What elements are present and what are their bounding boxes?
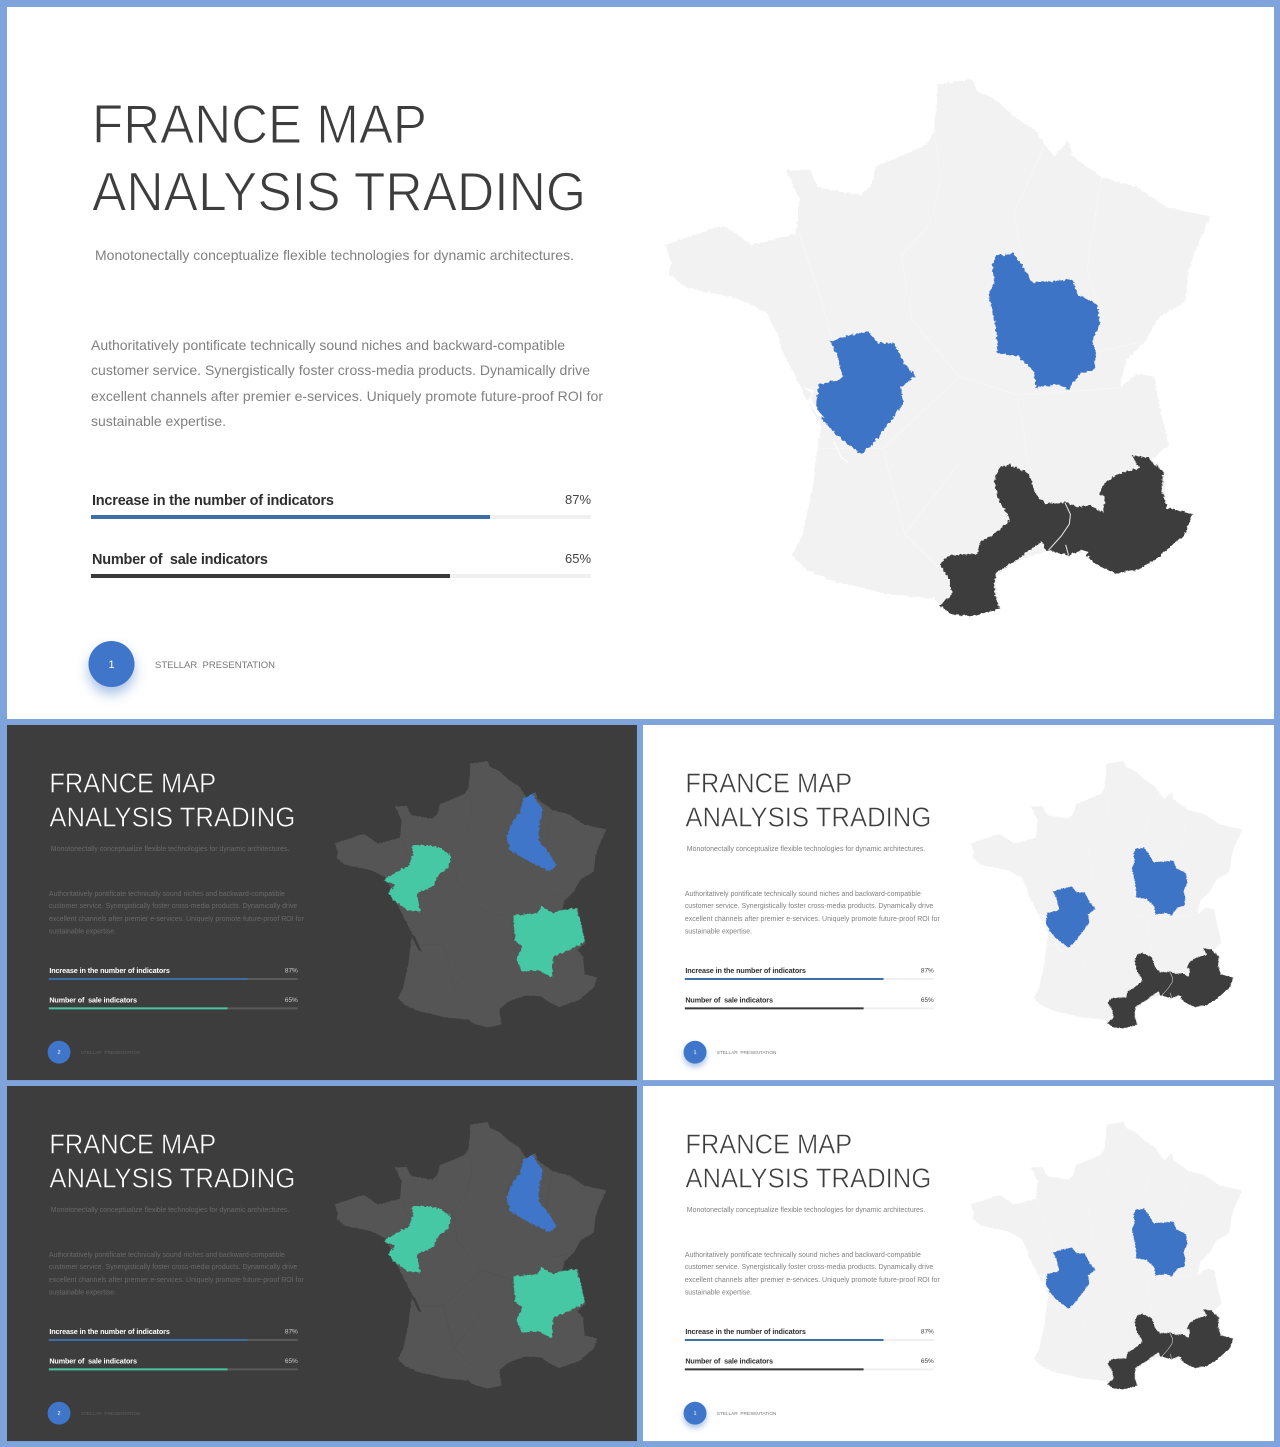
- title: [49, 768, 295, 832]
- panel: light slide bottom: [643, 1086, 1274, 1441]
- progress bar: indicators 87%: 87%: [565, 492, 591, 507]
- progress bar: indicators 87%: [685, 966, 934, 980]
- map of France with highlighted regions: [334, 1122, 606, 1388]
- footer label: STELLAR PRESENTATION: [81, 1411, 141, 1417]
- body paragraph: customer service. Synergistically foster cross-media products. Dynamically drive: [49, 1264, 297, 1271]
- body paragraph: customer service. Synergistically foster cross-media products. Dynamically drive: [91, 362, 590, 378]
- title: FRANCE MAP: [685, 768, 852, 799]
- page number badge: [684, 1041, 706, 1064]
- body paragraph: [49, 891, 304, 936]
- body paragraph: excellent channels after premier e-services. Uniquely promote future-proof ROI for: [49, 1277, 304, 1284]
- body paragraph: excellent channels after premier e-services. Uniquely promote future-proof ROI for: [91, 388, 603, 404]
- progress bar: indicators 87%: 87%: [921, 1329, 934, 1336]
- body paragraph: [91, 337, 603, 429]
- progress bar: indicators 87%: 87%: [285, 1329, 298, 1336]
- progress bar: indicators 87%: [91, 492, 591, 519]
- page number badge: 1: [694, 1411, 697, 1417]
- body paragraph: sustainable expertise.: [49, 1290, 116, 1297]
- progress bar: sale indicators 65%: Number of sale indicators: [685, 995, 773, 1004]
- progress bar: sale indicators 65%: 65%: [565, 551, 591, 566]
- map of France with highlighted regions: [970, 761, 1242, 1028]
- panel: light slide top: [643, 725, 1274, 1080]
- progress bar: indicators 87%: Increase in the number of indicators: [685, 1327, 806, 1336]
- body paragraph: sustainable expertise.: [685, 1290, 752, 1297]
- page number badge: 2: [58, 1411, 61, 1417]
- footer label: STELLAR PRESENTATION: [81, 1050, 141, 1056]
- progress bar: sale indicators 65%: [49, 995, 298, 1009]
- panel: dark slide bottom: [7, 1086, 637, 1441]
- title: ANALYSIS TRADING: [685, 1162, 931, 1193]
- progress bar: sale indicators 65%: Number of sale indicators: [92, 552, 268, 568]
- map of France with highlighted regions: [665, 79, 1211, 616]
- body paragraph: Authoritatively pontificate technically sound niches and backward-compatible: [49, 891, 285, 898]
- progress bar: sale indicators 65%: Number of sale indicators: [685, 1356, 773, 1365]
- title: FRANCE MAP: [92, 93, 427, 155]
- title: ANALYSIS TRADING: [49, 801, 295, 832]
- progress bar: sale indicators 65%: [91, 551, 591, 578]
- map of France with highlighted regions: [334, 761, 606, 1027]
- body paragraph: Authoritatively pontificate technically sound niches and backward-compatible: [91, 337, 565, 353]
- body paragraph: sustainable expertise.: [91, 413, 226, 429]
- progress bar: indicators 87%: [685, 1327, 934, 1341]
- progress bar: indicators 87%: [49, 966, 298, 980]
- progress bar: sale indicators 65%: 65%: [921, 1358, 934, 1365]
- body paragraph: [685, 891, 940, 936]
- body paragraph: [685, 1252, 940, 1297]
- footer label: STELLAR PRESENTATION: [155, 660, 275, 671]
- body paragraph: Authoritatively pontificate technically sound niches and backward-compatible: [685, 1252, 921, 1259]
- panel: dark slide top: [7, 725, 637, 1080]
- map of France with highlighted regions: [970, 1122, 1242, 1389]
- page number badge: [48, 1041, 70, 1064]
- body paragraph: Authoritatively pontificate technically sound niches and backward-compatible: [49, 1252, 285, 1259]
- page number badge: 2: [58, 1050, 61, 1056]
- title: ANALYSIS TRADING: [685, 801, 931, 832]
- body paragraph: [49, 1252, 304, 1297]
- progress bar: sale indicators 65%: 65%: [921, 997, 934, 1004]
- progress bar: indicators 87%: 87%: [285, 968, 298, 975]
- progress bar: sale indicators 65%: [685, 995, 934, 1009]
- body paragraph: excellent channels after premier e-services. Uniquely promote future-proof ROI for: [685, 916, 940, 923]
- title: [49, 1129, 295, 1193]
- title: [685, 1129, 931, 1193]
- title: [685, 768, 931, 832]
- body paragraph: customer service. Synergistically foster cross-media products. Dynamically drive: [685, 903, 933, 910]
- progress bar: sale indicators 65%: [685, 1356, 934, 1370]
- subtitle: Monotonectally conceptualize flexible technologies for dynamic architectures.: [687, 1207, 925, 1214]
- page number badge: [48, 1402, 70, 1425]
- subtitle: Monotonectally conceptualize flexible technologies for dynamic architectures.: [51, 846, 289, 853]
- progress bar: indicators 87%: [49, 1327, 298, 1341]
- page number badge: 1: [694, 1050, 697, 1056]
- progress bar: sale indicators 65%: 65%: [285, 997, 298, 1004]
- subtitle: Monotonectally conceptualize flexible technologies for dynamic architectures.: [95, 247, 574, 263]
- page number badge: 1: [108, 659, 115, 671]
- subtitle: Monotonectally conceptualize flexible technologies for dynamic architectures.: [51, 1207, 289, 1214]
- panel: large light slide: [7, 7, 1274, 719]
- subtitle: Monotonectally conceptualize flexible technologies for dynamic architectures.: [687, 846, 925, 853]
- title: ANALYSIS TRADING: [92, 160, 586, 222]
- title: [92, 93, 586, 222]
- body paragraph: excellent channels after premier e-services. Uniquely promote future-proof ROI for: [685, 1277, 940, 1284]
- progress bar: sale indicators 65%: Number of sale indicators: [49, 995, 137, 1004]
- page number badge: [684, 1402, 706, 1425]
- body paragraph: Authoritatively pontificate technically sound niches and backward-compatible: [685, 891, 921, 898]
- progress bar: indicators 87%: Increase in the number of indicators: [92, 493, 334, 509]
- progress bar: sale indicators 65%: [49, 1356, 298, 1370]
- page number badge: [88, 641, 134, 687]
- body paragraph: sustainable expertise.: [685, 929, 752, 936]
- progress bar: sale indicators 65%: 65%: [285, 1358, 298, 1365]
- body paragraph: customer service. Synergistically foster cross-media products. Dynamically drive: [685, 1264, 933, 1271]
- body paragraph: sustainable expertise.: [49, 929, 116, 936]
- title: FRANCE MAP: [49, 768, 216, 799]
- title: ANALYSIS TRADING: [49, 1162, 295, 1193]
- progress bar: indicators 87%: 87%: [921, 968, 934, 975]
- progress bar: indicators 87%: Increase in the number of indicators: [685, 966, 806, 975]
- title: FRANCE MAP: [685, 1129, 852, 1160]
- progress bar: sale indicators 65%: Number of sale indicators: [49, 1356, 137, 1365]
- body paragraph: excellent channels after premier e-services. Uniquely promote future-proof ROI for: [49, 916, 304, 923]
- progress bar: indicators 87%: Increase in the number of indicators: [49, 1327, 170, 1336]
- body paragraph: customer service. Synergistically foster cross-media products. Dynamically drive: [49, 903, 297, 910]
- footer label: STELLAR PRESENTATION: [717, 1411, 777, 1417]
- progress bar: indicators 87%: Increase in the number of indicators: [49, 966, 170, 975]
- footer label: STELLAR PRESENTATION: [717, 1050, 777, 1056]
- title: FRANCE MAP: [49, 1129, 216, 1160]
